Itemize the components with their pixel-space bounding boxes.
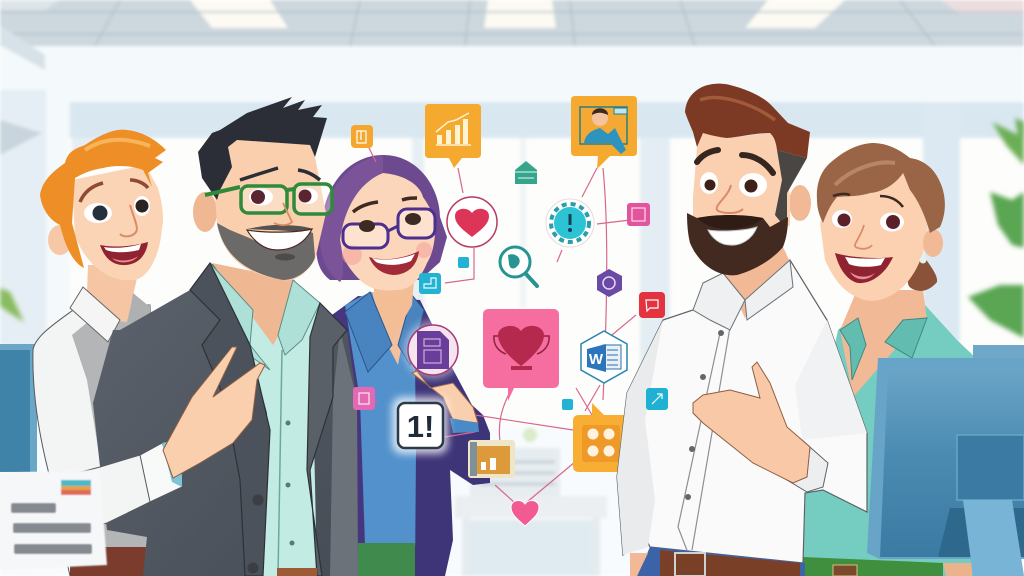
callout: 1! card: [392, 397, 448, 454]
smile: [247, 229, 312, 250]
icon: pink heart: [511, 500, 539, 526]
bun: [905, 258, 937, 291]
person: black hair green glasses: [93, 97, 358, 576]
neck: [713, 247, 790, 318]
purple glasses: [343, 198, 435, 248]
smile: [369, 251, 419, 275]
teal shirt: [803, 305, 978, 576]
hand on chest: [693, 362, 810, 483]
teeth: [708, 227, 757, 245]
icon: purple hexagon: [597, 269, 622, 297]
icon: pink trophy bubble: [483, 309, 559, 401]
person: orange hair forearm and hand: [50, 347, 265, 535]
collars: [840, 318, 927, 380]
collar: [70, 287, 120, 342]
hair: [685, 84, 810, 158]
neck: [87, 265, 140, 322]
placket: [678, 327, 730, 553]
beard: [687, 213, 788, 275]
ear: [789, 185, 811, 221]
green trousers: [358, 543, 415, 576]
icon: Word hexagon: [581, 331, 627, 383]
back desk: [455, 428, 607, 576]
icon: heart circle: [447, 197, 497, 247]
head: [693, 133, 790, 270]
head: [72, 165, 163, 280]
ear: [48, 225, 72, 255]
icon: photo chart card: [468, 440, 515, 478]
hair: [817, 143, 945, 233]
callout: 1! card: 1!: [407, 409, 434, 444]
shirt: [345, 292, 420, 545]
icon: gear circle: [546, 199, 594, 247]
white shirt: [617, 260, 867, 563]
lapels: [190, 263, 270, 576]
smile: [835, 253, 893, 283]
mint shirt: [212, 268, 320, 576]
person: orange hair: [33, 130, 166, 576]
orange hair: [40, 130, 166, 268]
belt: [803, 557, 943, 576]
trousers and belt: [637, 547, 805, 576]
icon: globe magnifier: [500, 247, 537, 286]
neck and chest: [840, 290, 927, 397]
connector lines: [362, 148, 646, 503]
icon: chart speech bubble: [425, 104, 481, 168]
icon: orange dice bubble: [573, 403, 630, 472]
hand of purple-haired person: [412, 371, 479, 433]
jacket: [325, 296, 445, 576]
hair back: [316, 155, 447, 280]
ear: [193, 192, 217, 232]
eyes: [697, 150, 773, 213]
person: purple hair: [316, 155, 490, 576]
left monitor: [0, 344, 37, 472]
ear: [923, 229, 943, 257]
body and sleeve: [33, 305, 152, 576]
paper sheet: [0, 470, 107, 570]
icon: purple document circle: [404, 321, 462, 379]
moustache: [697, 215, 763, 229]
nose: [274, 203, 292, 225]
neck: [372, 270, 415, 340]
icon: small orange document: [351, 125, 373, 148]
black hair: [198, 97, 327, 200]
icon: green box: [515, 161, 537, 184]
person: brown hair woman: [803, 143, 978, 576]
icon: pink square: [627, 203, 650, 226]
head: [820, 160, 930, 301]
green glasses: [205, 168, 332, 214]
eyes: [80, 180, 150, 236]
jacket: [93, 263, 358, 576]
person: bearded man: [617, 84, 867, 576]
smile: [100, 242, 148, 265]
jacket right panel: [415, 345, 490, 576]
right monitor: [867, 345, 1024, 576]
word letter: W: [589, 351, 604, 368]
windows: [0, 75, 1024, 428]
eyes: [832, 194, 904, 249]
head: [340, 173, 435, 291]
icon: teal square on shirt: [646, 388, 668, 410]
plants: [0, 118, 1024, 338]
icon: small pink square: [353, 387, 375, 410]
collar: [693, 260, 793, 330]
icon: small teal square right: [562, 399, 573, 410]
icon: red chat square: [639, 292, 665, 318]
ceiling: [0, 0, 1024, 100]
grey side: [775, 150, 807, 230]
head: [215, 140, 326, 280]
beard: [217, 223, 315, 280]
icon: presenter speech bubble: [571, 96, 637, 169]
moustache: [247, 225, 313, 232]
icon: small teal squares: [419, 257, 469, 294]
